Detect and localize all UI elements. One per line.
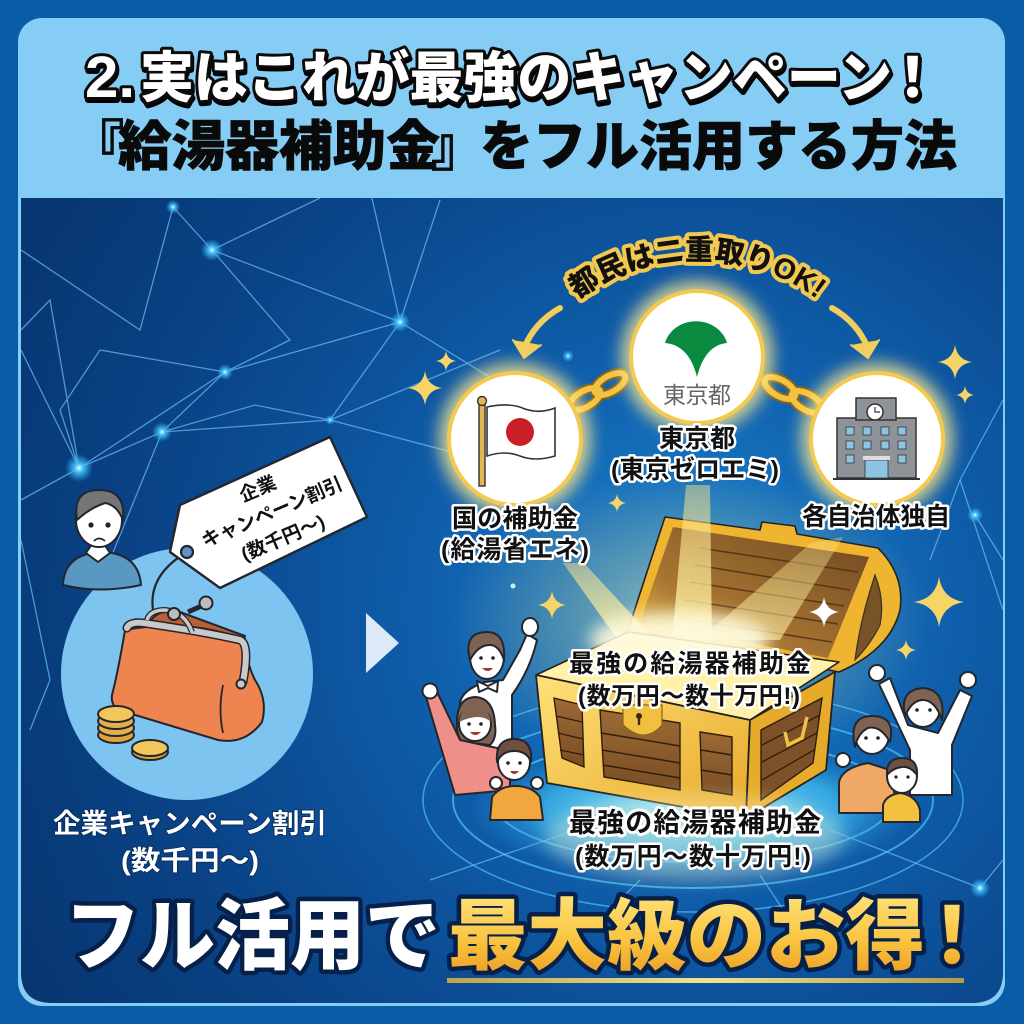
chest label: 最強の給湯器補助金 — [569, 650, 811, 678]
lower label: 最強の給湯器補助金 — [569, 808, 821, 838]
central glow — [590, 612, 770, 668]
title: 給湯器補助金 — [118, 117, 440, 177]
price tag: 企業 — [236, 472, 280, 507]
lower label: (数万円～数十万円!) — [575, 843, 811, 871]
price tag: (数千円〜) — [238, 511, 328, 566]
arrow right — [366, 613, 399, 673]
title: 』 — [431, 117, 485, 177]
node: tokyo: 東京都 — [659, 425, 735, 453]
chest side face — [746, 672, 835, 818]
node: national subsidy: 国の補助金 — [452, 505, 578, 533]
node: tokyo: (東京ゼロエミ) — [611, 455, 779, 484]
bottom headline — [65, 892, 991, 983]
right family — [836, 665, 976, 822]
curved gold arrows — [513, 308, 879, 358]
chest lid — [628, 517, 901, 672]
tag string — [152, 552, 187, 610]
gold chains — [566, 369, 826, 417]
gold underline — [447, 978, 964, 983]
main dark blue panel — [21, 198, 1003, 1003]
right scene: treasure & subsidies — [408, 231, 977, 892]
bottom headline: 最大級のお得 — [448, 892, 925, 980]
title: ！ — [885, 47, 940, 109]
node: tokyo: 東京都 — [663, 382, 731, 408]
title — [70, 45, 957, 177]
title: 実はこれが最強のキャンペーン — [140, 47, 892, 109]
title: をフル活用する方法 — [480, 117, 957, 177]
light rays — [563, 485, 843, 640]
price tag: キャンペーン割引 — [198, 473, 346, 552]
curved label: double-dip ok: 都民は二重取りOK! — [563, 231, 830, 304]
mother in white — [869, 665, 976, 795]
node: national subsidy — [439, 363, 591, 564]
icon: municipal building — [833, 398, 920, 479]
light blue circle — [61, 548, 313, 800]
chest opening — [536, 632, 839, 720]
left group: company campaign discount — [53, 437, 367, 876]
node: tokyo — [611, 281, 779, 484]
sparkles — [408, 345, 974, 660]
icon: tokyo ginkgo logo — [665, 321, 727, 377]
child in yellow — [883, 758, 920, 822]
chest label: (数万円～数十万円!) — [578, 683, 800, 710]
treasure chest — [536, 485, 901, 818]
bottom headline: フル活用で — [65, 892, 440, 980]
left caption — [53, 809, 327, 876]
chest front face — [536, 675, 750, 818]
icon: worried person — [63, 490, 141, 590]
mother in orange — [836, 716, 898, 813]
father — [460, 618, 538, 748]
background network lines — [21, 198, 1003, 935]
node: local government: 各自治体独自 — [802, 503, 950, 531]
white glint — [809, 597, 839, 627]
price tag — [170, 437, 367, 588]
node: national subsidy: (給湯省エネ) — [441, 536, 589, 564]
child — [490, 739, 543, 820]
left caption: (数千円〜) — [121, 846, 259, 876]
node: local government — [801, 363, 953, 531]
lower label — [545, 794, 845, 882]
title: 『 — [70, 117, 124, 177]
icon: japan flag — [478, 396, 555, 486]
title: 2. — [85, 45, 135, 110]
icon: purse with coins — [98, 596, 264, 760]
left caption: 企業キャンペーン割引 — [53, 809, 327, 839]
bottom headline: ！ — [913, 892, 991, 980]
base glow ring — [450, 470, 930, 878]
chest label — [569, 650, 811, 710]
left family — [422, 618, 543, 820]
mother — [422, 684, 510, 795]
